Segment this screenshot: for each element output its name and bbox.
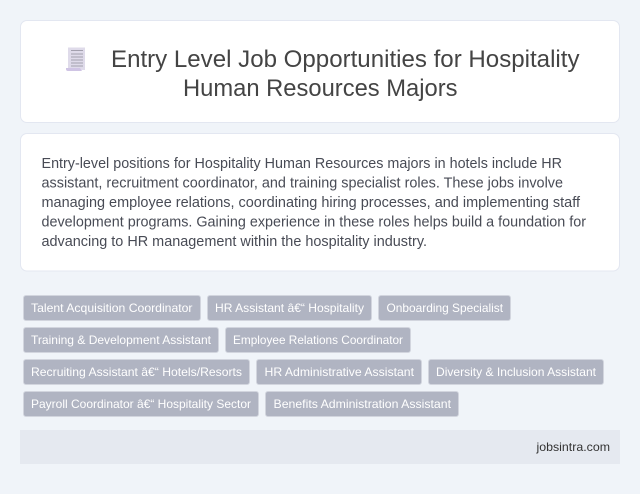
tag: Training & Development Assistant — [31, 333, 212, 347]
tag — [24, 360, 250, 384]
tag — [24, 392, 258, 416]
tag: Benefits Administration Assistant — [274, 397, 452, 411]
tag — [256, 360, 422, 384]
panel: description — [20, 134, 620, 271]
tag: Payroll Coordinator â€“ Hospitality Sector — [31, 397, 251, 411]
title: Human Resources Majors — [183, 75, 458, 102]
tag — [428, 360, 604, 384]
tag: Onboarding Specialist — [386, 301, 504, 315]
text block: description: assistant, recruitment coordinator, and training specialist roles. These jobs involve — [42, 174, 563, 192]
tag list — [24, 296, 604, 416]
tag — [24, 328, 218, 352]
footer bar — [20, 430, 620, 464]
tag: HR Assistant â€“ Hospitality — [215, 301, 364, 315]
footer source text: jobsintra.com — [535, 440, 610, 454]
text block: description — [42, 155, 586, 250]
tag: Employee Relations Coordinator — [233, 333, 403, 347]
tag — [226, 328, 410, 352]
tag — [378, 296, 510, 320]
tag — [24, 296, 200, 320]
tag: Diversity & Inclusion Assistant — [436, 365, 597, 379]
tag: Recruiting Assistant â€“ Hotels/Resorts — [31, 365, 242, 379]
tag: Talent Acquisition Coordinator — [31, 301, 192, 315]
tag: HR Administrative Assistant — [264, 365, 415, 379]
text block: description: managing employee relations, coordinating hiring processes, and implementing staff — [42, 194, 581, 211]
title: Entry Level Job Opportunities for Hospitality — [111, 46, 580, 73]
text block: description: Entry-level positions for Hospitality Human Resources majors in hotels include HR — [42, 155, 562, 172]
text block: description: advancing to HR management within the hospitality industry. — [42, 233, 427, 250]
tag — [208, 296, 372, 320]
icon: document scroll — [66, 48, 85, 71]
tag — [266, 392, 458, 416]
text block: description: development programs. Gaining experience in these roles helps build a foundation for — [42, 214, 586, 230]
title — [111, 46, 580, 102]
panel: title card — [20, 20, 620, 122]
